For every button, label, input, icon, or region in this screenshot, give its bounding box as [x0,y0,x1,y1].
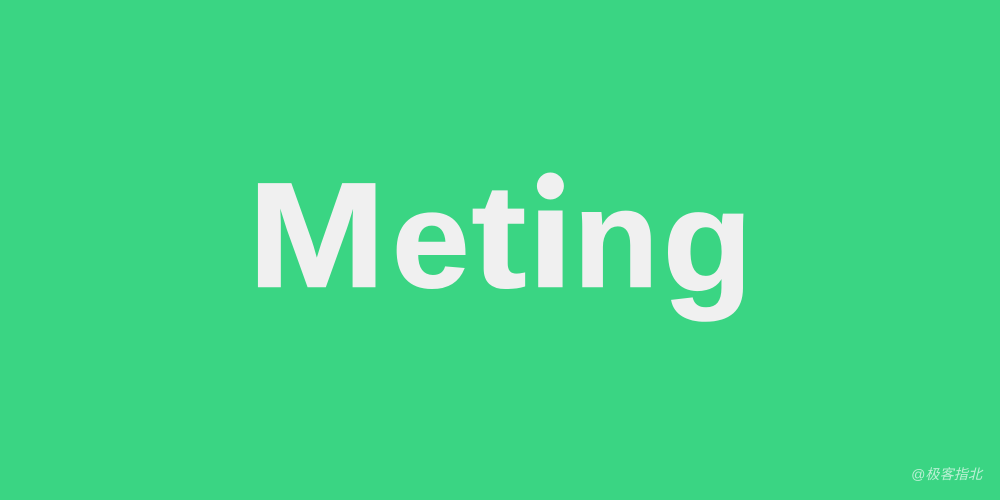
title: M [248,152,386,319]
title [258,172,744,322]
title: t [472,155,526,319]
banner [258,172,984,481]
watermark: @极客指北 [911,466,984,482]
title: g [663,160,752,321]
title: e [392,164,470,317]
title: i [528,157,573,317]
title: n [573,160,659,316]
